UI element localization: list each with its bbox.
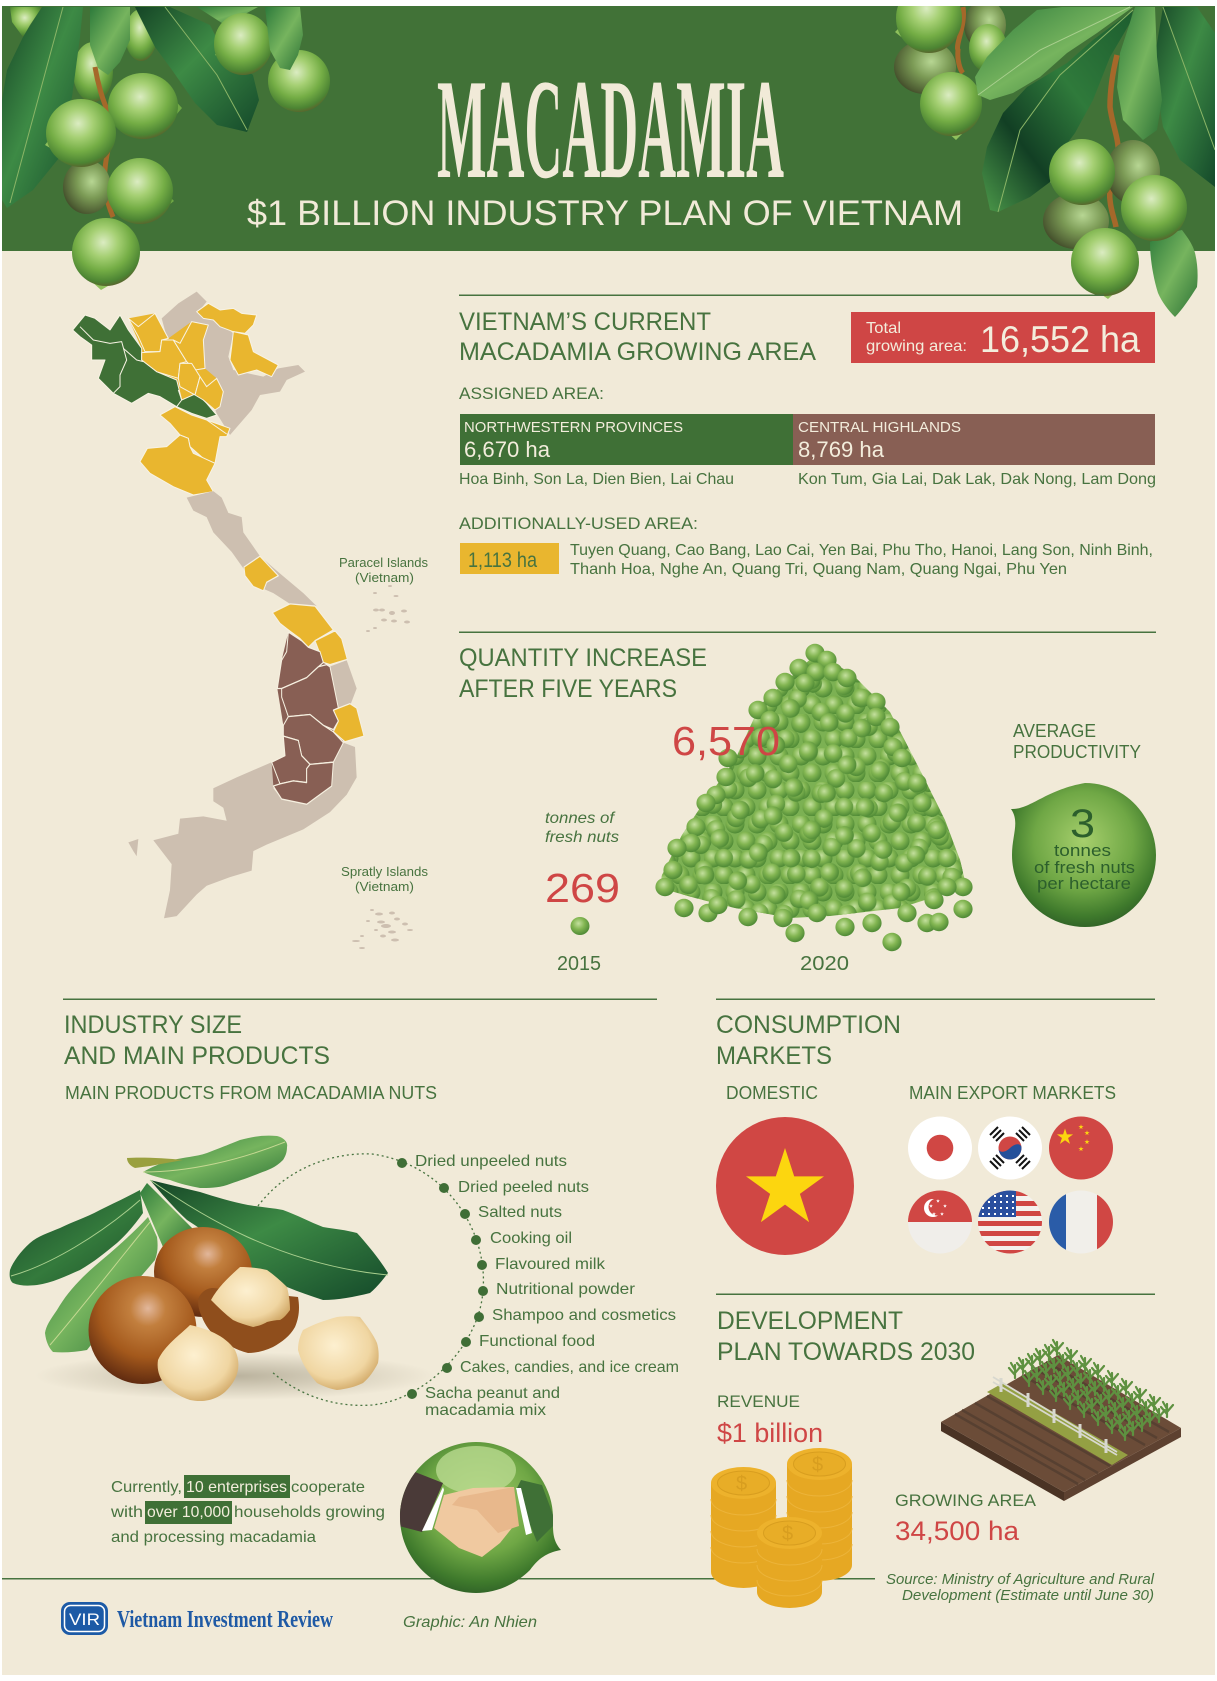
coin stack: right — [787, 1448, 852, 1581]
nut pile 2020 — [650, 644, 980, 955]
list of main products: Shampoo and cosmetics — [492, 1307, 676, 1324]
subtitle: $1 BILLION INDUSTRY PLAN OF VIETNAM — [247, 194, 963, 233]
additional province list: Tuyen Quang, Cao Bang, Lao Cai, Yen Bai, Phu Tho, Hanoi, Lang Son, Ninh Binh, — [570, 542, 1153, 559]
text: enterprises and households: over 10,000 — [147, 1504, 230, 1521]
badge: 1,113 ha: 1,113 ha — [468, 549, 537, 572]
text: enterprises and households: households growing — [234, 1504, 385, 1521]
central highlands province list: Kon Tum, Gia Lai, Dak Lak, Dak Nong, Lam Dong — [798, 471, 1156, 488]
text: enterprises and households: Currently, — [111, 1479, 182, 1496]
icon: single nut 2015 — [570, 917, 590, 935]
map label: Spratly Islands: Spratly Islands — [341, 865, 428, 879]
list of main products: Dried unpeeled nuts — [415, 1153, 567, 1170]
value: 269: 269 — [545, 865, 620, 911]
year label 2015: 2015 — [557, 953, 601, 975]
segment: northwestern provinces: 6,670 ha — [464, 437, 551, 462]
badge: 1,113 ha — [460, 543, 559, 574]
map label: Spratly Islands: (Vietnam) — [355, 880, 414, 894]
map label: Paracel Islands: (Vietnam) — [355, 571, 414, 585]
label: additionally-used area: ADDITIONALLY-USED AREA: — [459, 514, 698, 533]
callout: productivity nut — [1011, 783, 1156, 927]
callout: productivity nut: per hectare — [1037, 874, 1131, 893]
flag: China — [1049, 1116, 1113, 1180]
revenue label and value — [717, 1392, 823, 1448]
text: enterprises and households: cooperate — [291, 1479, 365, 1496]
assigned area bar — [460, 414, 1155, 465]
source note — [886, 1571, 1155, 1604]
map: northern provinces — [73, 292, 305, 495]
heading: consumption markets: CONSUMPTION — [716, 1011, 901, 1039]
flag: Japan — [908, 1116, 972, 1180]
map: central and southern provinces — [128, 491, 364, 918]
unit: tonnes of fresh nuts: tonnes of — [545, 810, 616, 827]
heading: quantity increase: AFTER FIVE YEARS — [459, 675, 677, 703]
coin stack: left: $ — [736, 1473, 747, 1495]
icon: coin stacks — [711, 1448, 852, 1608]
coin stack: front: $ — [782, 1523, 793, 1545]
revenue label and value: REVENUE — [717, 1392, 800, 1411]
unit: tonnes of fresh nuts: fresh nuts — [545, 829, 619, 846]
segment: northwestern provinces — [460, 414, 793, 465]
heading: development plan: DEVELOPMENT — [717, 1307, 903, 1335]
flag: United States — [978, 1190, 1042, 1255]
heading: quantity increase: QUANTITY INCREASE — [459, 644, 707, 672]
source note: Development (Estimate until June 30) — [902, 1587, 1154, 1604]
northwestern province list: Hoa Binh, Son La, Dien Bien, Lai Chau — [459, 471, 734, 488]
flag: France — [1049, 1190, 1114, 1254]
flag: Vietnam — [716, 1117, 854, 1255]
illustration: macadamia nuts and leaves — [10, 1136, 435, 1401]
logo: Vietnam Investment Review — [61, 1602, 333, 1635]
heading: current growing area: VIETNAM’S CURRENT — [459, 308, 711, 336]
heading: industry size: INDUSTRY SIZE — [64, 1011, 242, 1039]
logo: Vietnam Investment Review: VIR — [69, 1610, 100, 1629]
heading: average productivity: PRODUCTIVITY — [1013, 742, 1141, 762]
heading: development plan: PLAN TOWARDS 2030 — [717, 1338, 975, 1366]
map label: Paracel Islands — [339, 556, 428, 585]
text: enterprises and households: and processing macadamia — [111, 1529, 316, 1546]
heading: consumption markets: MARKETS — [716, 1042, 832, 1070]
unit: tonnes of fresh nuts — [545, 810, 619, 846]
additional province list — [570, 542, 1153, 578]
label: main export markets: MAIN EXPORT MARKETS — [909, 1083, 1116, 1103]
list of main products — [415, 1153, 679, 1419]
callout: total growing area: 16,552 ha — [980, 319, 1140, 360]
flag: Singapore — [908, 1190, 972, 1254]
list of main products: Sacha peanut and — [425, 1385, 560, 1402]
credit: graphic: Graphic: An Nhien — [403, 1614, 537, 1631]
list of main products: Dried peeled nuts — [458, 1179, 589, 1196]
heading: average productivity — [1013, 721, 1141, 762]
text: enterprises and households: with — [110, 1504, 143, 1521]
heading: current growing area — [459, 308, 816, 366]
dotted arc with product markers — [258, 1154, 488, 1405]
growing area label and value: 34,500 ha — [895, 1516, 1020, 1546]
flag: South Korea — [978, 1116, 1042, 1180]
heading: consumption markets — [716, 1011, 901, 1070]
segment: northwestern provinces: NORTHWESTERN PROVINCES — [464, 419, 683, 436]
coin stack: left — [711, 1467, 776, 1588]
year label 2020: 2020 — [800, 953, 849, 975]
list of main products: Cooking oil — [490, 1230, 572, 1247]
text: enterprises and households — [110, 1475, 385, 1546]
paracel islands dots — [366, 585, 410, 632]
coin stack: right: $ — [812, 1454, 823, 1476]
callout: total growing area: Total — [866, 320, 901, 337]
list of main products: Cakes, candies, and ice cream — [460, 1359, 679, 1376]
label: domestic: DOMESTIC — [726, 1083, 818, 1103]
additional province list: Thanh Hoa, Nghe An, Quang Tri, Quang Nam, Quang Ngai, Phu Yen — [570, 561, 1067, 578]
list of main products: Flavoured milk — [495, 1256, 606, 1273]
subheading: main products: MAIN PRODUCTS FROM MACADAMIA NUTS — [65, 1083, 437, 1103]
heading: development plan — [717, 1307, 975, 1366]
icon: handshake in nut — [395, 1442, 561, 1593]
list of main products: Nutritional powder — [496, 1281, 636, 1298]
revenue label and value: $1 billion — [717, 1418, 823, 1448]
text: enterprises and households: 10 enterprises — [186, 1479, 287, 1496]
segment: central highlands: CENTRAL HIGHLANDS — [798, 419, 961, 436]
heading: industry size — [64, 1011, 330, 1070]
callout: productivity nut: tonnes — [1054, 841, 1111, 860]
callout: total growing area — [851, 312, 1155, 363]
header banner — [2, 6, 1215, 251]
list of main products: Salted nuts — [478, 1204, 562, 1221]
list of main products: macadamia mix — [425, 1402, 546, 1419]
segment: central highlands: 8,769 ha — [798, 437, 885, 462]
list of main products: Functional food — [479, 1333, 595, 1350]
heading: quantity increase — [459, 644, 707, 703]
map of Vietnam — [73, 292, 413, 949]
coin stack: front — [757, 1517, 822, 1608]
segment: central highlands — [793, 414, 1155, 465]
callout: productivity nut: 3 — [1070, 802, 1095, 846]
value: 6,570: 6,570 — [672, 718, 780, 764]
source note: Source: Ministry of Agriculture and Rural — [886, 1571, 1155, 1588]
map label: Paracel Islands: Paracel Islands — [339, 556, 428, 570]
illustration: isometric field — [941, 1340, 1181, 1501]
growing area label and value — [895, 1491, 1037, 1546]
label: assigned area: ASSIGNED AREA: — [459, 384, 604, 403]
spratly islands dots — [352, 909, 413, 949]
foliage: right branch with green nuts — [894, 0, 1215, 317]
growing area label and value: GROWING AREA — [895, 1491, 1037, 1510]
map label: Spratly Islands — [341, 865, 428, 894]
heading: industry size: AND MAIN PRODUCTS — [64, 1042, 330, 1070]
logo: Vietnam Investment Review: Vietnam Investment Review — [117, 1607, 333, 1633]
heading: current growing area: MACADAMIA GROWING AREA — [459, 338, 816, 366]
heading: average productivity: AVERAGE — [1013, 721, 1096, 741]
callout: total growing area: growing area: — [866, 338, 967, 355]
callout: productivity nut: of fresh nuts — [1034, 858, 1135, 877]
foliage: left branch with green nuts — [2, 7, 330, 290]
